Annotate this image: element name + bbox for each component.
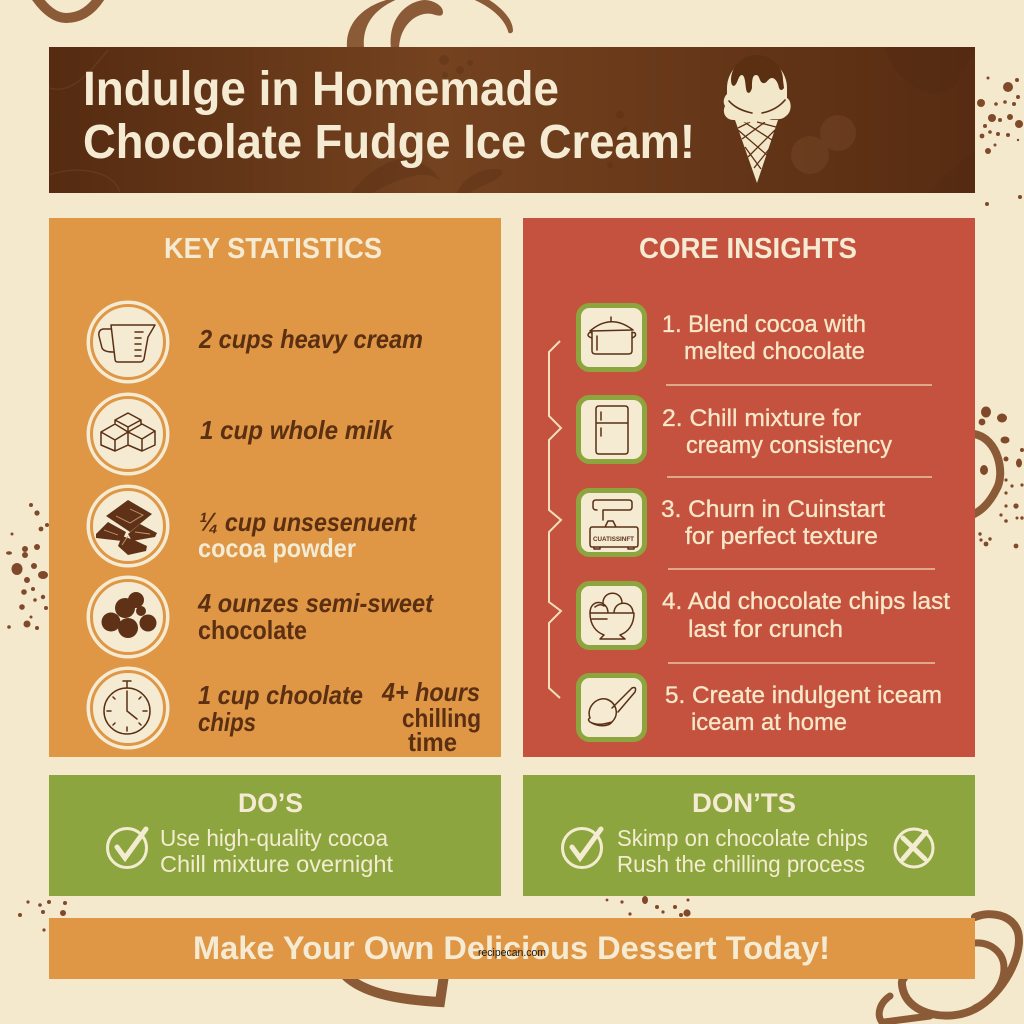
call to action banner: Make Your Own Delicious Dessert Today! bbox=[193, 930, 830, 966]
do's list bbox=[160, 825, 394, 877]
step 4: chocolate chips bbox=[578, 584, 950, 648]
stat: cocoa powder: ¼ cup unsesenuent bbox=[199, 507, 417, 537]
panel: don'ts bbox=[523, 775, 975, 896]
step 1: blend bbox=[578, 306, 866, 370]
stat: heavy cream: 2 cups heavy cream bbox=[198, 324, 423, 354]
stat: semi-sweet chocolate: 4 ounzes semi-sweet bbox=[197, 588, 434, 618]
title: Indulge in Homemade bbox=[83, 63, 559, 116]
step 2: chill bbox=[578, 398, 892, 462]
heading: don'ts: DON’TS bbox=[692, 788, 796, 818]
call to action banner bbox=[49, 918, 975, 979]
stat: heavy cream bbox=[86, 300, 423, 384]
icon: check bbox=[108, 828, 146, 868]
stat: chocolate chips and chilling time bbox=[86, 666, 481, 757]
stat: cocoa powder: cocoa powder bbox=[198, 533, 356, 563]
step 2: chill: 2. Chill mixture for bbox=[662, 405, 861, 432]
step 2: chill: creamy consistency bbox=[686, 432, 892, 459]
stat: chocolate chips and chilling time: 1 cup choolate bbox=[198, 680, 363, 710]
stat: semi-sweet chocolate bbox=[86, 576, 434, 658]
panel: core insights bbox=[523, 218, 975, 757]
stat: whole milk: 1 cup whole milk bbox=[200, 415, 394, 445]
step 1: blend: melted chocolate bbox=[684, 338, 865, 365]
heading: core insights: CORE INSIGHTS bbox=[639, 233, 857, 265]
title: Chocolate Fudge Ice Cream! bbox=[83, 116, 695, 169]
icon: cross bbox=[895, 829, 933, 867]
step 5: indulgent ice cream: iceam at home bbox=[691, 709, 847, 736]
step 4: chocolate chips: 4. Add chocolate chips last bbox=[662, 588, 950, 615]
stat: chocolate chips and chilling time: chips bbox=[198, 707, 256, 737]
watermark: recipecan.com bbox=[478, 947, 546, 959]
step 4: chocolate chips: last for crunch bbox=[688, 616, 843, 643]
step 1: blend: 1. Blend cocoa with bbox=[662, 311, 866, 338]
bracket bbox=[549, 341, 561, 698]
header banner bbox=[49, 47, 975, 193]
do's list: Chill mixture overnight bbox=[160, 851, 394, 877]
stat: semi-sweet chocolate: chocolate bbox=[198, 615, 307, 645]
stat: whole milk bbox=[86, 392, 394, 476]
title bbox=[83, 63, 695, 169]
step 3: churn: CUATISSINFT bbox=[593, 536, 634, 543]
stat: chocolate chips and chilling time: chilling bbox=[402, 703, 481, 733]
step 5: indulgent ice cream bbox=[578, 676, 942, 740]
step 3: churn: for perfect texture bbox=[685, 523, 878, 550]
step 3: churn: 3. Churn in Cuinstart bbox=[661, 496, 885, 523]
stat: chocolate chips and chilling time: 4+ hours bbox=[381, 677, 480, 707]
stat: cocoa powder bbox=[86, 484, 417, 568]
icon: check bbox=[562, 828, 602, 868]
heading: do's: DO’S bbox=[238, 788, 303, 818]
step 3: churn bbox=[578, 490, 885, 554]
don'ts list bbox=[617, 825, 868, 877]
do's list: Use high-quality cocoa bbox=[160, 825, 388, 851]
don'ts list: Rush the chilling process bbox=[617, 851, 865, 877]
step 5: indulgent ice cream: 5. Create indulgent iceam bbox=[665, 682, 942, 709]
stat: chocolate chips and chilling time: time bbox=[408, 727, 457, 757]
faint header decoration bbox=[49, 47, 975, 193]
heading: key statistics: KEY STATISTICS bbox=[164, 233, 382, 265]
panel: do's bbox=[49, 775, 501, 896]
icon: ice cream cone bbox=[724, 55, 791, 183]
panel: key statistics bbox=[49, 218, 501, 757]
don'ts list: Skimp on chocolate chips bbox=[617, 825, 868, 851]
